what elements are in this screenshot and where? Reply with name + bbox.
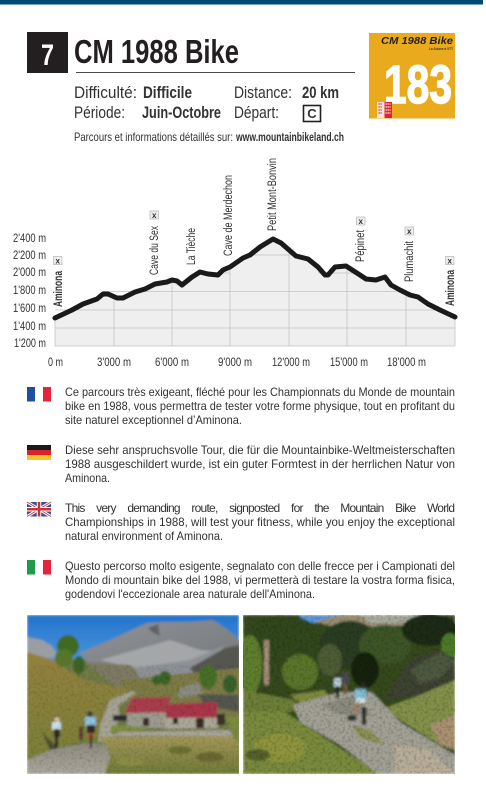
x axis labels: 9'000 m	[218, 357, 252, 369]
title rule	[76, 72, 355, 73]
y axis labels: 1'800 m	[13, 285, 46, 297]
logo: route sign 183: CM 1988 Bike	[381, 35, 453, 47]
Italian text: Mondo di mountain bike del 1988, vi permetterà di testare la vostra forma fisica,	[65, 573, 455, 587]
icon: Italian flag	[27, 560, 51, 574]
x axis labels: 18'000 m	[387, 357, 426, 369]
logo: route sign 183: La Suisse à VTT	[429, 47, 454, 51]
distance: Distance:	[234, 83, 292, 102]
profile line	[55, 239, 455, 318]
Italian text: godendovi l'eccezionale area naturale dell'Aminona.	[65, 587, 315, 601]
difficulty: Difficulté:	[74, 83, 137, 102]
French text: bike en 1988, vous permettra de tester votre forme physique, tout en profitant du	[65, 399, 455, 413]
French section	[27, 385, 455, 427]
website line: Parcours et informations détaillés sur:	[74, 130, 233, 144]
English text: Championships in 1988, will test your fitness, while you enjoy the exceptional	[65, 515, 455, 529]
top bar	[0, 0, 483, 5]
waypoint: Cave de Merdechon: Cave de Merdechon	[223, 175, 235, 256]
difficulty: Difficile	[143, 83, 192, 102]
waypoint: Cave du Sex: Cave du Sex	[149, 226, 161, 275]
logo: route sign 183: 183	[384, 55, 452, 115]
waypoint: Aminona finish: x	[448, 256, 453, 266]
period	[74, 103, 221, 122]
icon: UK flag	[27, 502, 51, 516]
waypoint: Aminona finish: Aminona	[445, 270, 457, 306]
waypoint: Pépinet: Pépinet	[355, 229, 367, 262]
route number badge	[27, 32, 68, 73]
period: Période:	[74, 103, 125, 122]
waypoint: Plumachit: Plumachit	[404, 240, 416, 282]
grid lines	[55, 248, 455, 346]
period: Juin-Octobre	[142, 103, 221, 122]
German text: Diese sehr anspruchsvolle Tour, die für die Mountainbike-Weltmeisterschaften	[65, 443, 455, 457]
Italian section	[27, 559, 455, 601]
distance	[234, 83, 339, 102]
start: Départ:	[234, 103, 279, 122]
x axis labels: 12'000 m	[272, 357, 310, 369]
difficulty	[74, 83, 192, 102]
waypoint: Cave du Sex: x	[152, 211, 157, 220]
French text	[65, 385, 455, 427]
German text: Aminona.	[65, 471, 110, 485]
website line: www.mountainbikeland.ch	[235, 130, 344, 144]
start: C	[307, 106, 317, 121]
y axis labels: 1'200 m	[14, 338, 46, 350]
French text: Ce parcours très exigeant, fléché pour les Championnats du Monde de mountain	[65, 385, 455, 399]
icon: German flag	[27, 445, 51, 460]
waypoint: Plumachit: x	[407, 227, 412, 236]
Italian text	[65, 559, 455, 601]
x axis labels: 0 m	[48, 357, 63, 369]
x axis labels: 15'000 m	[330, 357, 368, 369]
waypoint: Aminona start: Aminona	[53, 271, 65, 307]
x axis labels: 6'000 m	[155, 357, 189, 369]
German text	[65, 443, 455, 485]
French text: site naturel exceptionnel d’Aminona.	[65, 413, 242, 427]
area under profile	[55, 239, 455, 346]
y axis labels: 2'200 m	[13, 250, 46, 262]
x axis labels	[48, 357, 426, 369]
logo: route sign 183	[369, 33, 455, 118]
y axis labels: 1'400 m	[13, 321, 46, 333]
route number badge: 7	[41, 39, 54, 72]
start	[234, 103, 320, 122]
waypoint: Aminona start: x	[56, 256, 61, 266]
English text: This very demanding route, signposted for the Mountain Bike World	[65, 501, 455, 515]
y axis labels: 2'400 m	[13, 233, 46, 245]
German text: 1988 ausgeschildert wurde, ist ein guter Formtest in der herrlichen Natur von	[65, 457, 455, 471]
waypoint: Petit Mont-Bonvin: Petit Mont-Bonvin	[267, 158, 279, 231]
photo: cyclists by alpine hut	[27, 615, 240, 774]
German section	[27, 443, 455, 485]
title: CM 1988 Bike	[74, 33, 239, 70]
icon: Valais flag	[377, 102, 392, 118]
waypoint: Pépinet: x	[359, 217, 364, 226]
y axis labels: 2'000 m	[13, 267, 46, 279]
route facts	[74, 83, 339, 122]
English text: natural environment of Aminona.	[65, 529, 223, 543]
English section	[27, 501, 455, 543]
elevation profile chart	[13, 158, 457, 369]
y axis labels	[13, 233, 46, 350]
x axis labels: 3'000 m	[97, 357, 131, 369]
distance: 20 km	[302, 83, 339, 102]
English text	[65, 501, 455, 543]
waypoint: La Tièche: La Tièche	[186, 228, 198, 265]
Italian text: Questo percorso molto esigente, segnalato con delle frecce per i Campionati del	[65, 559, 455, 573]
y axis labels: 1'600 m	[13, 303, 46, 315]
icon: French flag	[27, 387, 51, 402]
photo: cyclists on forest track	[238, 614, 459, 774]
